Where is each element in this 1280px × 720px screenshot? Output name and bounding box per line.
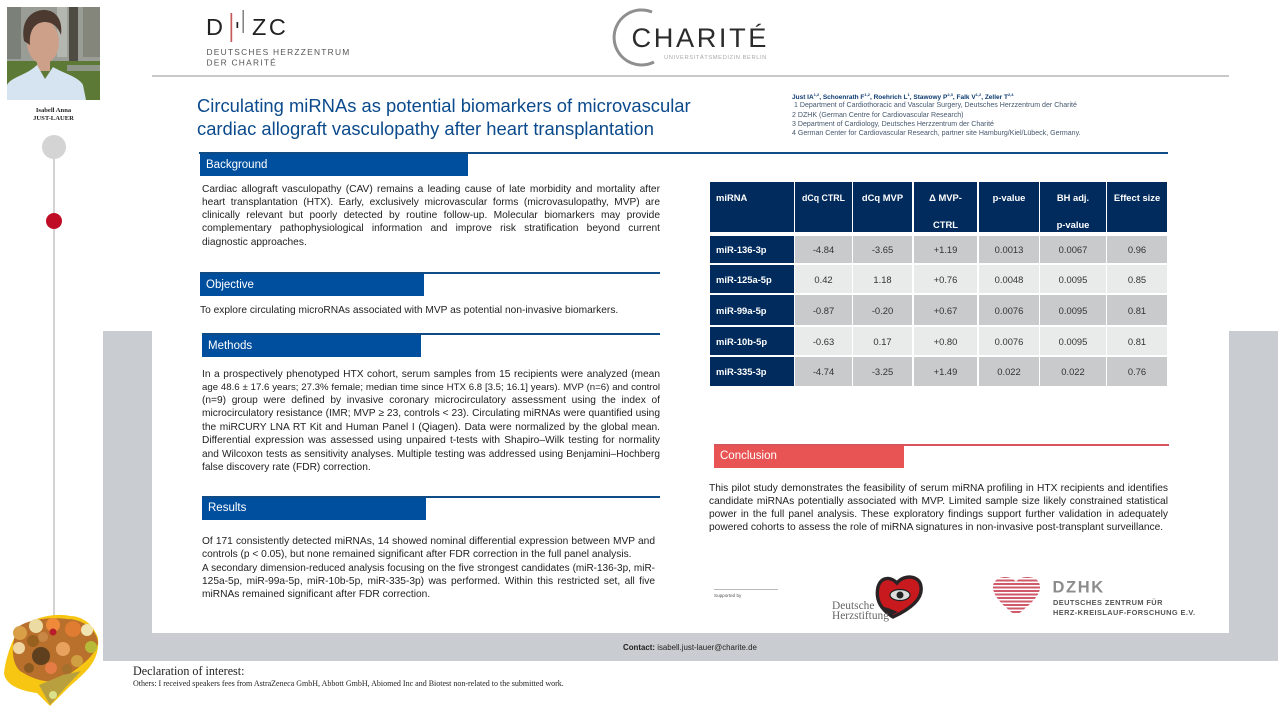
title: Circulating miRNAs as potential biomarkers of microvascular: [197, 95, 691, 116]
heading: results: [202, 497, 426, 520]
text: background: Cardiac allograft vasculopathy (CAV) remains a leading cause of late morbidity and mortality after: [202, 184, 660, 195]
logo: DZHK: HERZ-KREISLAUF-FORSCHUNG E.V.: [1053, 608, 1195, 617]
heading: methods: [202, 335, 421, 357]
text: results: controls (p < 0.05), but none remained significant after FDR correction in the full panel analysis.: [202, 549, 632, 560]
text: methods: microcirculatory resistance (IMR; MVP ≥ 23, controls < 23). Circulating miRNAs were quantified using: [202, 408, 660, 419]
row: miR-99a-5p: 0.0076: [995, 304, 1023, 316]
section: results: [202, 496, 660, 600]
row: miR-136-3p: -4.84: [813, 244, 834, 255]
row: miR-335-3p: 0.76: [1128, 366, 1146, 377]
section: background: [200, 154, 660, 248]
table header row: dCq MVP: [862, 192, 903, 203]
results rule: [202, 496, 660, 498]
text: background: [202, 184, 660, 248]
row: miR-10b-5p: [710, 327, 1167, 355]
row: miR-125a-5p: 0.85: [1128, 274, 1146, 284]
row: miR-136-3p: 0.0067: [1059, 244, 1087, 255]
row: miR-335-3p: 0.022: [997, 366, 1021, 377]
heading: conclusion: Conclusion: [720, 450, 777, 462]
text: background: heart transplantation (HTX). Early, exclusively microvascular forms (microvasulopathy, MVP) are: [202, 197, 660, 208]
logo: DHZC: DER CHARITÉ: [206, 58, 277, 68]
logo: DHZC: D: [206, 14, 223, 40]
text: background: clinically relevant but poorly detected by routine follow-up. Molecular biomarkers may provide: [202, 210, 660, 221]
row: miR-125a-5p: 1.18: [873, 274, 892, 284]
timeline red node: [46, 213, 62, 229]
row: miR-136-3p: -3.65: [872, 244, 893, 255]
text: results: miRNAs remained significant after FDR correction.: [202, 589, 430, 600]
declaration of interest: [133, 664, 564, 688]
row: miR-335-3p: 0.022: [1061, 366, 1085, 377]
row: miR-99a-5p: +0.67: [934, 304, 957, 316]
row: miR-136-3p: miR-136-3p: [716, 244, 767, 255]
text: methods: [202, 369, 660, 473]
row: miR-335-3p: +1.49: [934, 366, 957, 377]
text: methods: and Wilcoxon tests as sensitivity analyses. Multiple testing was addressed using Benjamini–Hochberg: [202, 449, 660, 460]
row: miR-125a-5p: [710, 265, 1167, 293]
logo: DHZC: [206, 10, 350, 68]
authors: 1 Department of Cardiothoracic and Vascular Surgery, Deutsches Herzzentrum der Charité: [794, 102, 1077, 109]
text: methods: Differential expression was assessed using unpaired t-tests with Shapiro–Wilk testing for normality: [202, 435, 660, 446]
row: miR-10b-5p: -0.63: [813, 336, 834, 346]
text: background: complementary pathophysiological information and improve risk stratification beyond current: [202, 223, 660, 234]
header rule: [152, 75, 1229, 76]
row: miR-335-3p: -3.25: [872, 366, 893, 377]
heading: background: Background: [206, 159, 267, 171]
declaration text: Others: I received speakers fees from AstraZeneca GmbH, Abbott GmbH, Abiomed Inc and Biotest non-related to the submitted work.: [133, 679, 564, 688]
row: miR-136-3p: +1.19: [934, 244, 957, 255]
row: miR-10b-5p: miR-10b-5p: [716, 336, 767, 346]
row: miR-99a-5p: miR-99a-5p: [716, 304, 767, 316]
text: objective: To explore circulating microRNAs associated with MVP as potential non-invasive biomarkers.: [200, 305, 618, 316]
supported by rule: [714, 589, 778, 590]
timeline gray node: [42, 135, 66, 159]
logo: DZHK: DEUTSCHES ZENTRUM FÜR: [1053, 598, 1163, 607]
row: miR-335-3p: [710, 357, 1167, 386]
gray background frame: [103, 331, 1278, 661]
row: miR-10b-5p: 0.17: [873, 336, 892, 346]
text: conclusion: [709, 483, 1168, 533]
presenter name: JUST-LAUER: [33, 115, 74, 122]
logo: DZHK: DZHK: [1052, 578, 1105, 596]
title: cardiac allograft vasculopathy after heart transplantation: [197, 118, 654, 139]
text: methods: (n=9) group were defined by invasive coronary microcirculatory assessment using the index of: [202, 395, 660, 406]
text: methods: In a prospectively phenotyped HTX cohort, serum samples from 15 recipients were analyzed (mean: [202, 369, 660, 380]
row: miR-136-3p: 0.96: [1128, 244, 1146, 255]
authors: 3 Department of Cardiology, Deutsches Herzzentrum der Charité: [792, 121, 994, 128]
text: conclusion: powered cohorts to assess the role of miRNA signatures in non-invasive post-transplant surveillance.: [709, 522, 1163, 533]
row: miR-99a-5p: -0.20: [872, 304, 893, 316]
heading: methods: Methods: [208, 340, 252, 352]
logo: DZHK: [993, 577, 1195, 617]
conclusion rule: [714, 444, 1169, 446]
table header row: p-value: [993, 192, 1025, 203]
section: objective: [200, 272, 660, 316]
presenter name: Isabell Anna: [36, 107, 71, 114]
table header row: BH adj.: [1057, 192, 1089, 203]
objective rule: [200, 272, 660, 274]
contact: Contact: isabell.just-lauer@charite.de: [623, 643, 757, 652]
top blue rule: [199, 152, 1168, 154]
heading: background: [200, 154, 468, 176]
supported by label: Supported by: [714, 593, 741, 598]
row: miR-335-3p: miR-335-3p: [716, 366, 767, 377]
text: methods: the miRCURY LNA RT Kit and Human Panel I (Qiagen). Data were normalized by the global mean.: [202, 422, 660, 433]
title: [197, 95, 691, 139]
section: conclusion: [709, 444, 1169, 533]
row: miR-10b-5p: 0.0095: [1059, 336, 1087, 346]
presenter name: [33, 107, 74, 122]
row: miR-125a-5p: miR-125a-5p: [716, 274, 772, 284]
results table: [710, 182, 1167, 386]
row: miR-10b-5p: +0.80: [934, 336, 957, 346]
row: miR-125a-5p: +0.76: [934, 274, 957, 284]
row: miR-335-3p: -4.74: [813, 366, 834, 377]
logo: Deutsche Herzstiftung: Herzstiftung: [832, 610, 889, 622]
methods rule: [202, 333, 660, 334]
table header row: dCq CTRL: [802, 192, 845, 202]
text: results: 125a-5p, miR-99a-5p, miR-10b-5p, miR-335-3p) was performed. Within this restricted set, all five: [202, 576, 655, 587]
text: background: diagnostic approaches.: [202, 237, 307, 248]
heading: results: Results: [208, 502, 246, 514]
row: miR-10b-5p: 0.81: [1128, 336, 1146, 346]
authors: Just IA1,2, Schoenrath F1,2, Roehrich L1, Stawowy P2,3, Falk V1,2, Zeller T2,4: [792, 92, 1014, 101]
row: miR-125a-5p: 0.0095: [1059, 274, 1087, 284]
row: miR-99a-5p: 0.0095: [1059, 304, 1087, 316]
text: methods: age 48.6 ± 17.6 years; 27.3% female; median time since HTX 6.8 [3.5; 16.1] years). MVP (n=6) and control: [202, 382, 660, 393]
table header row: Effect size: [1114, 192, 1160, 203]
row: miR-125a-5p: 0.0048: [995, 274, 1023, 284]
timeline line: [53, 150, 54, 630]
heading: objective: Objective: [206, 279, 254, 291]
table header row: p-value: [1057, 219, 1089, 230]
logo: DHZC: DEUTSCHES HERZZENTRUM: [206, 47, 350, 57]
logo: Charité: CHARITÉ: [632, 22, 769, 53]
row: miR-136-3p: [710, 236, 1167, 263]
row: miR-10b-5p: 0.0076: [995, 336, 1023, 346]
logo: Charité: UNIVERSITÄTSMEDIZIN BERLIN: [664, 54, 767, 61]
authors: 2 DZHK (German Centre for Cardiovascular Research): [792, 112, 964, 119]
presenter photo: [7, 7, 100, 100]
text: results: A secondary dimension-reduced analysis focusing on the five strongest candidates (miR-136-3p, miR-: [202, 563, 655, 574]
logo: Charité: [612, 8, 769, 66]
text: conclusion: power in the full panel analysis. These exploratory findings support further validation in adequately: [709, 509, 1168, 520]
text: results: [202, 536, 655, 600]
table header row: Δ MVP-: [929, 192, 962, 203]
logo: DHZC: ZC: [252, 14, 288, 40]
authors: [792, 92, 1081, 137]
heading: conclusion: [714, 445, 904, 468]
text: conclusion: candidate miRNAs potentially associated with MVP. Limited sample size likely constrained statistical: [709, 496, 1168, 507]
row: miR-136-3p: 0.0013: [995, 244, 1023, 255]
text: methods: false discovery rate (FDR) correction.: [202, 462, 371, 473]
declaration heading: Declaration of interest:: [133, 664, 244, 678]
table header row: [710, 182, 1167, 232]
row: miR-99a-5p: [710, 295, 1167, 325]
text: results: Of 171 consistently detected miRNAs, 14 showed nominal differential expression between MVP and: [202, 536, 655, 547]
white poster panel: [152, 76, 1229, 633]
authors: 4 German Center for Cardiovascular Research, partner site Hamburg/Kiel/Lübeck, Germany.: [792, 130, 1081, 137]
icon: mosaic heart: [4, 614, 98, 706]
section: methods: [202, 333, 660, 473]
row: miR-125a-5p: 0.42: [814, 274, 833, 284]
table header row: miRNA: [716, 192, 747, 203]
text: conclusion: This pilot study demonstrates the feasibility of serum miRNA profiling in HTX recipients and identifies: [709, 483, 1168, 494]
logo: Deutsche Herzstiftung: [832, 575, 923, 622]
heading: objective: [200, 274, 424, 296]
table header row: CTRL: [933, 219, 958, 230]
logo: Deutsche Herzstiftung: Deutsche: [832, 600, 874, 612]
row: miR-99a-5p: 0.81: [1128, 304, 1146, 316]
row: miR-99a-5p: -0.87: [813, 304, 834, 316]
